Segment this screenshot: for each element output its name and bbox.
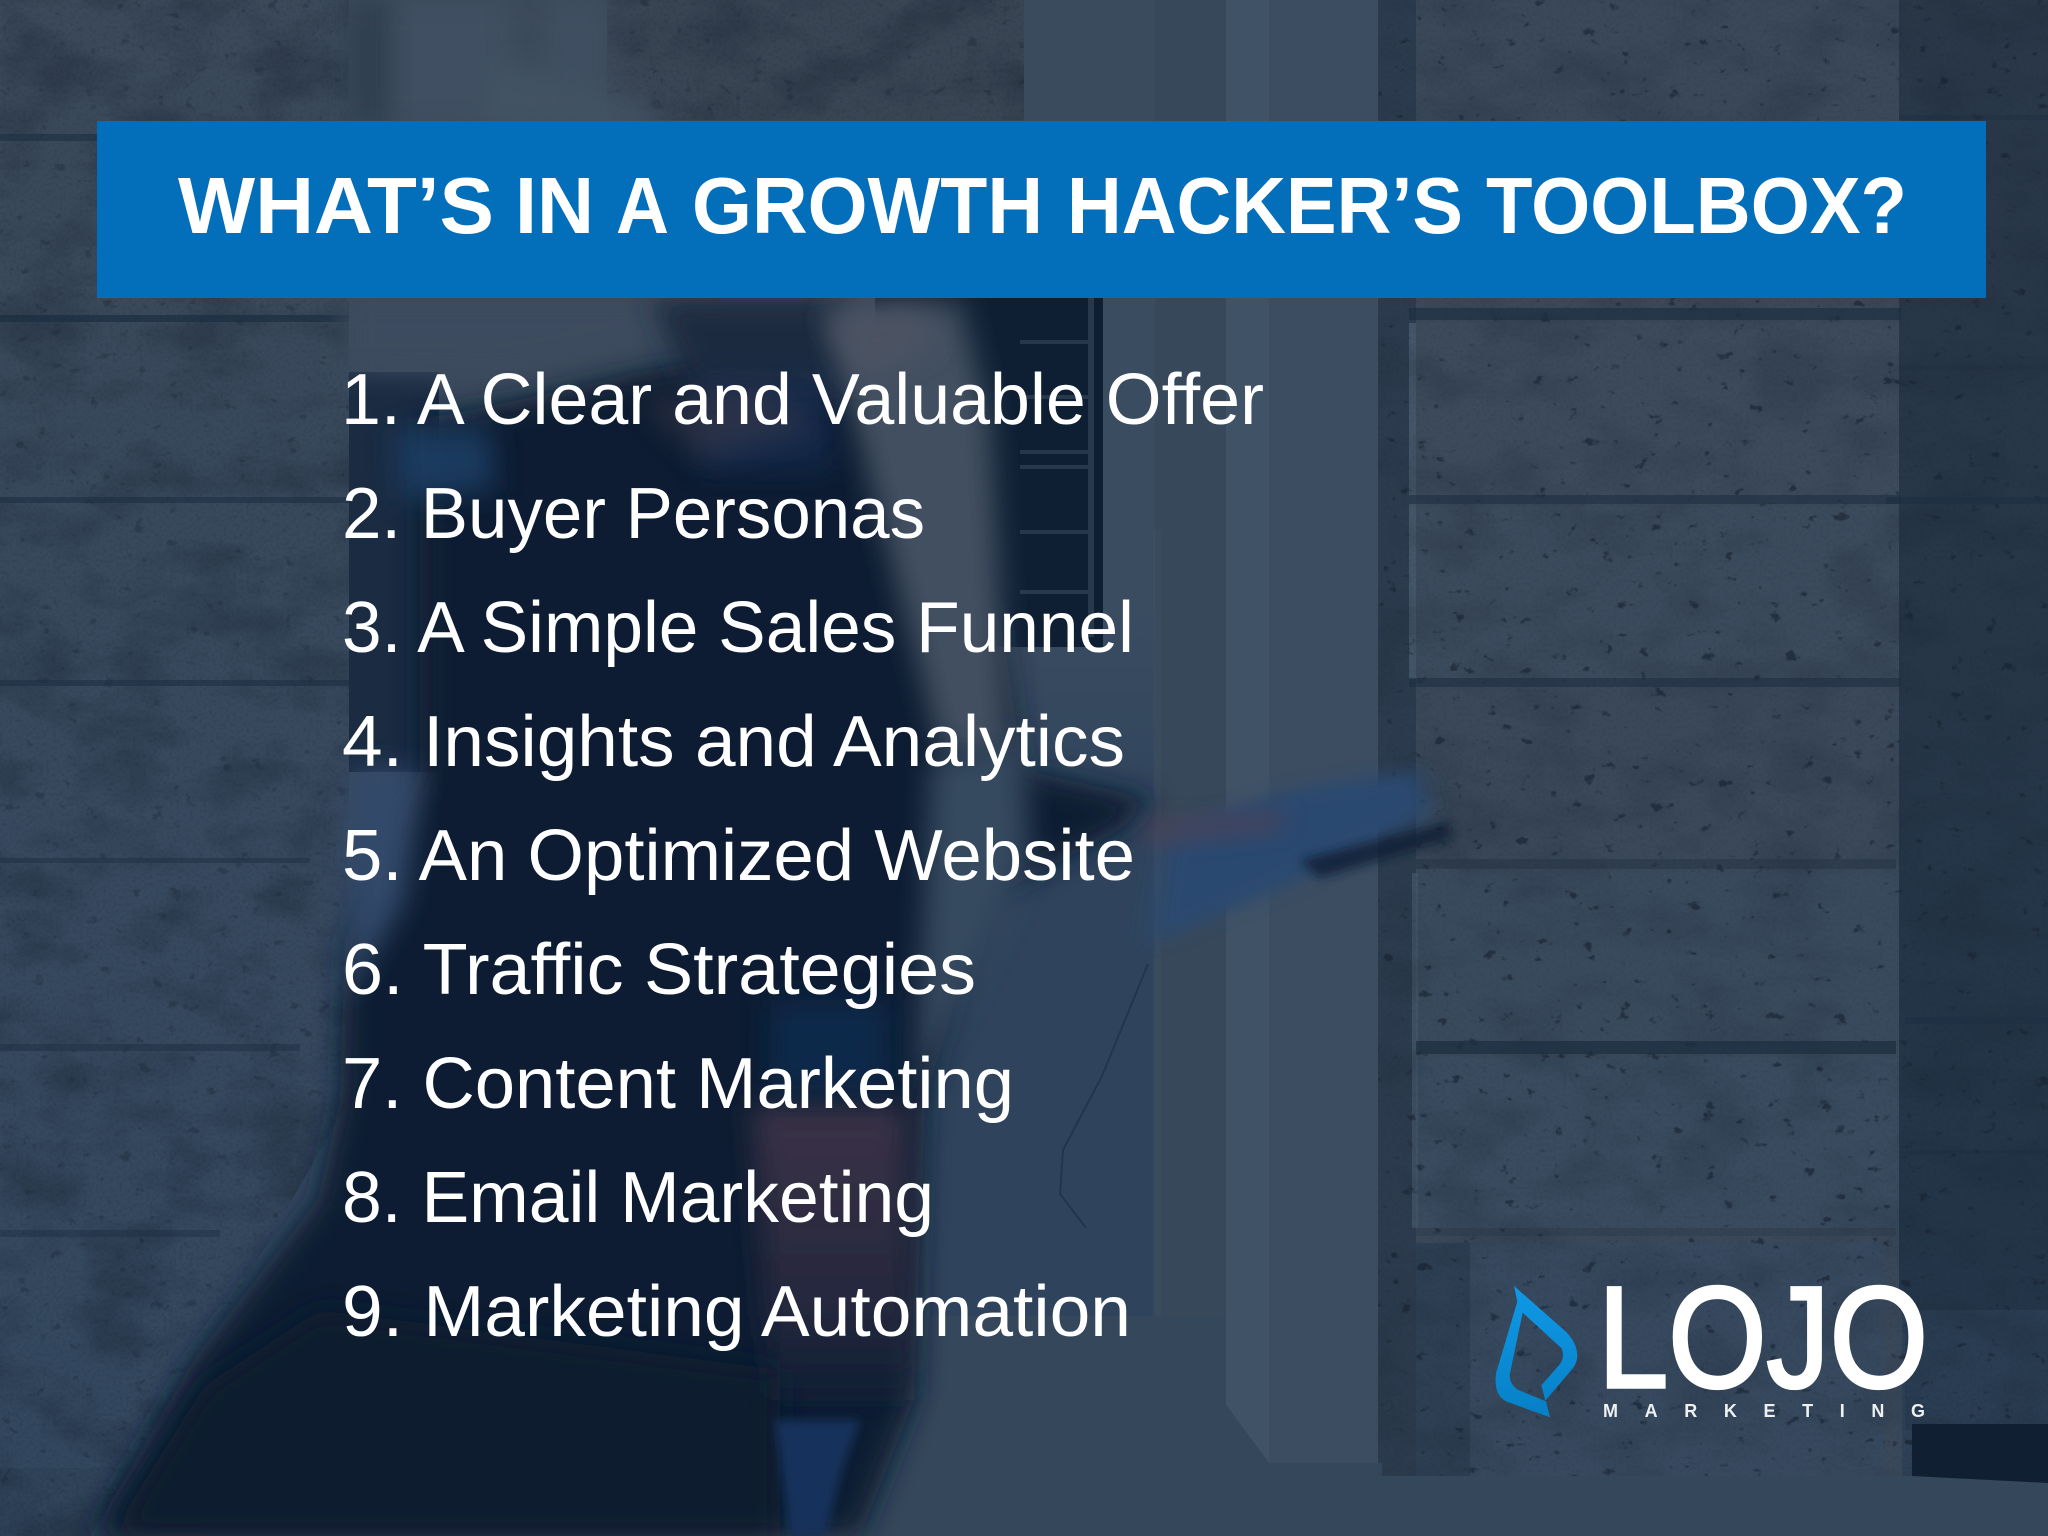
person: shoulder light area <box>345 298 700 375</box>
right dark wall <box>1899 0 2048 1310</box>
left stone wall <box>0 0 1160 1536</box>
window behind the person <box>875 297 1103 647</box>
mid wall top <box>607 0 1027 125</box>
stone texture right <box>1378 0 2048 1476</box>
floor <box>800 1316 2048 1536</box>
person: shoulder band <box>915 740 1030 1090</box>
mortar gap beside blocks <box>1378 0 1420 1480</box>
item 1: 1. A Clear and Valuable Offer <box>341 360 1264 440</box>
item 6: 6. Traffic Strategies <box>342 930 976 1010</box>
pillar <box>1024 0 1380 1463</box>
numbered list of tools <box>341 360 1264 1352</box>
heading: WHAT’S <box>178 161 494 250</box>
person: lower bag <box>110 1310 780 1536</box>
item 3: 3. A Simple Sales Funnel <box>342 588 1134 668</box>
title banner <box>97 121 1986 298</box>
person: dark blue chest <box>700 380 830 470</box>
person: navy body <box>91 340 1155 1536</box>
heading: HACKER’S <box>1067 161 1463 250</box>
person: trouser blue highlight <box>770 1000 890 1090</box>
person: hand highlight <box>826 305 935 380</box>
mid wall lower <box>930 760 1030 1340</box>
item 8: 8. Email Marketing <box>342 1158 934 1238</box>
item 9: 9. Marketing Automation <box>342 1272 1131 1352</box>
wall crack <box>1060 964 1148 1228</box>
dark corner bottom right <box>1912 1424 2048 1483</box>
person: leg <box>775 1420 860 1536</box>
heading: GROWTH <box>692 161 1043 250</box>
stone joints <box>0 115 2048 1237</box>
item 2: 2. Buyer Personas <box>342 474 925 554</box>
item 4: 4. Insights and Analytics <box>342 702 1125 782</box>
icon: blue drop <box>1496 1286 1577 1417</box>
heading: TOOLBOX? <box>1486 161 1907 250</box>
item 5: 5. An Optimized Website <box>342 816 1135 896</box>
person: blue shirt streak <box>395 428 495 500</box>
person: moving arm <box>1135 770 1452 945</box>
stone texture left <box>0 0 1024 1536</box>
heading: IN <box>515 161 594 250</box>
person: dark collar <box>650 298 850 400</box>
tagline: MARKETING <box>1603 1401 1925 1421</box>
item 7: 7. Content Marketing <box>342 1044 1014 1124</box>
heading: A <box>616 161 669 250</box>
person: pinkish collar <box>640 385 820 460</box>
logo: LOJO Marketing <box>1496 1257 1928 1421</box>
heading <box>178 161 1907 250</box>
right stone blocks <box>1409 0 1908 1476</box>
person: trouser pink patch <box>752 1105 915 1400</box>
person: left edge blur <box>345 770 420 1000</box>
person: light sleeve <box>826 300 1010 760</box>
darker zone beside the wall edge <box>349 372 439 772</box>
wordmark: LOJO <box>1598 1257 1928 1418</box>
person: upper light blur <box>352 0 670 135</box>
